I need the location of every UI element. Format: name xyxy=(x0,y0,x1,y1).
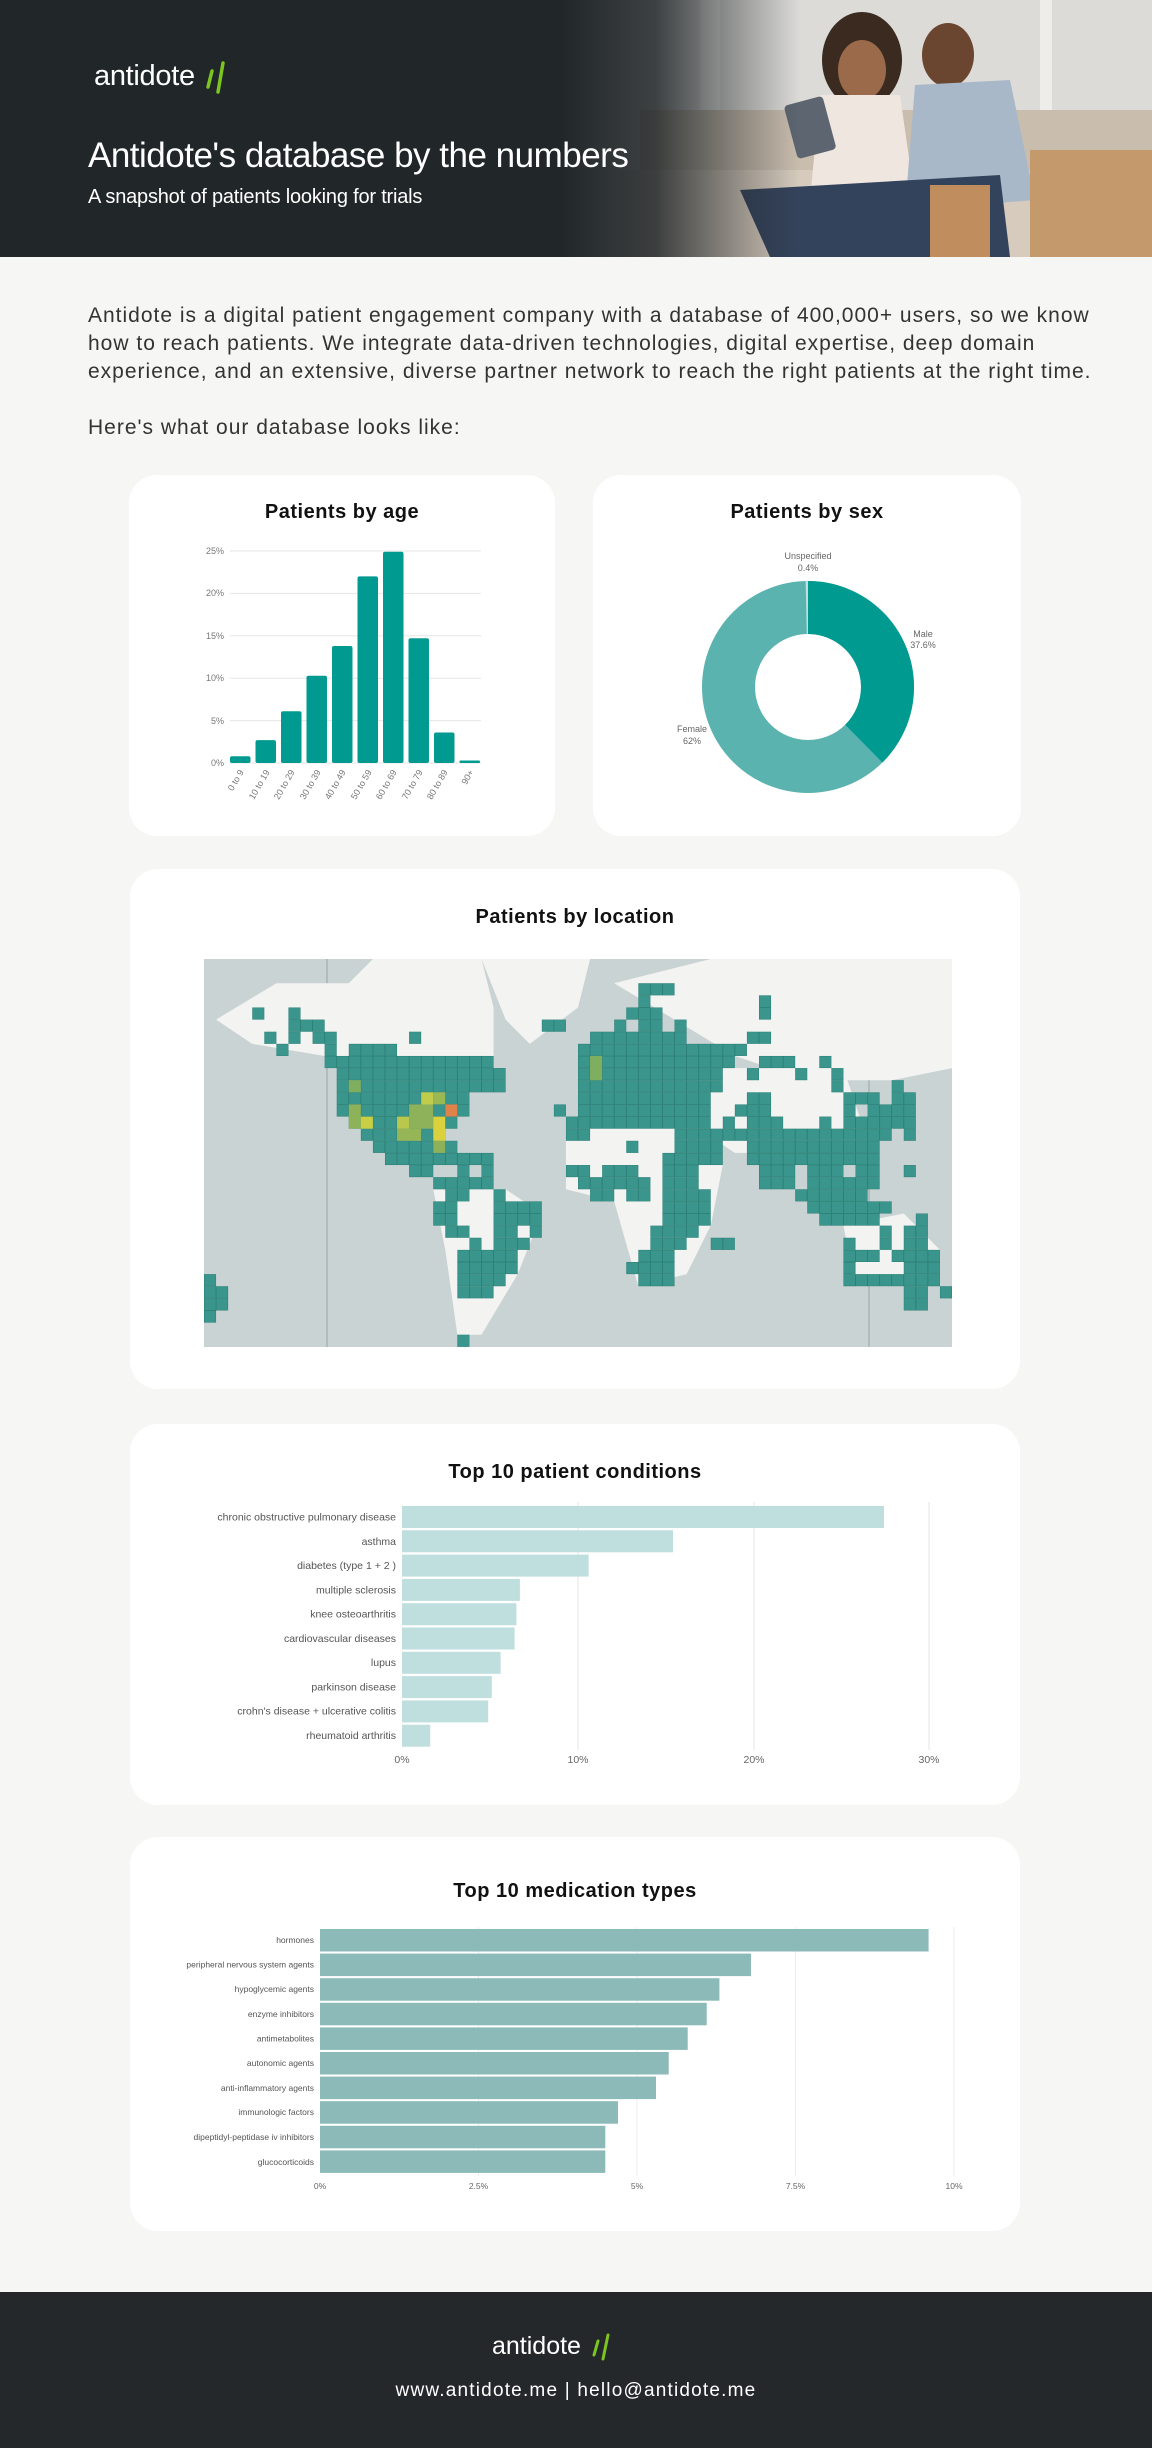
intro text: Here's what our database looks like: xyxy=(88,416,461,439)
chart: medication bars: 0% xyxy=(314,2181,327,2191)
chart: conditions bars: rheumatoid arthritis xyxy=(306,1730,396,1742)
chart: conditions bars: multiple sclerosis xyxy=(316,1584,396,1596)
chart: age bars: 10 to 19 xyxy=(247,768,272,801)
chart: conditions bars xyxy=(217,1502,940,1766)
chart: conditions bars: 0% xyxy=(394,1754,410,1766)
title: Antidote's database by the numbers xyxy=(88,136,628,175)
chart: age bars: 0 to 9 xyxy=(226,768,246,793)
chart: medication bars: 5% xyxy=(631,2181,644,2191)
map: grid world map xyxy=(204,959,952,1347)
panel: patients by location xyxy=(130,869,1020,1389)
intro text xyxy=(88,304,1092,439)
footer logo: antidote xyxy=(492,2332,581,2360)
chart: medication bars: immunologic factors xyxy=(238,2107,314,2117)
chart: age bars: 20% xyxy=(206,588,224,598)
chart: medication bars: autonomic agents xyxy=(247,2058,314,2068)
heading: Patients by age xyxy=(265,501,419,523)
chart: age bars: 60 to 69 xyxy=(374,768,399,801)
chart: conditions bars: parkinson disease xyxy=(311,1682,396,1694)
chart: medication bars xyxy=(186,1927,963,2191)
heading: Top 10 patient conditions xyxy=(448,1461,702,1483)
panel: patients by age xyxy=(129,475,555,836)
heading: Top 10 medication types xyxy=(453,1880,697,1902)
chart: sex donut xyxy=(677,551,936,793)
icon: logo slashes xyxy=(206,61,225,94)
chart: age bars: 80 to 89 xyxy=(425,768,450,801)
chart: medication bars: hormones xyxy=(276,1935,314,1945)
chart: sex donut: Male xyxy=(913,629,933,639)
heading: Patients by location xyxy=(476,906,674,928)
chart: sex donut: 62% xyxy=(683,736,701,746)
chart: medication bars: enzyme inhibitors xyxy=(248,2009,314,2019)
chart: medication bars: antimetabolites xyxy=(257,2034,314,2044)
chart: age bars: 10% xyxy=(206,673,224,683)
footer contact text: www.antidote.me | hello@antidote.me xyxy=(396,2380,756,2401)
chart: medication bars: anti-inflammatory agents xyxy=(221,2083,314,2093)
panel: top 10 medication types xyxy=(130,1837,1020,2231)
chart: conditions bars: cardiovascular diseases xyxy=(284,1633,396,1645)
chart: conditions bars: lupus xyxy=(371,1657,396,1669)
chart: medication bars: 7.5% xyxy=(786,2181,806,2191)
chart: age bars: 15% xyxy=(206,631,224,641)
subtitle: A snapshot of patients looking for trials xyxy=(88,186,422,208)
footer xyxy=(0,2292,1152,2448)
chart: medication bars: 10% xyxy=(945,2181,963,2191)
header photo xyxy=(588,0,1152,257)
intro text: Antidote is a digital patient engagement company with a database of 400,000+ users, so we know xyxy=(88,304,1090,327)
chart: sex donut: 37.6% xyxy=(910,640,936,650)
chart: sex donut: Unspecified xyxy=(784,551,832,561)
chart: conditions bars: diabetes (type 1 + 2 ) xyxy=(297,1560,396,1572)
chart: conditions bars: 30% xyxy=(918,1754,940,1766)
chart: age bars: 50 to 59 xyxy=(349,768,374,801)
chart: conditions bars: asthma xyxy=(362,1536,396,1548)
chart: age bars: 70 to 79 xyxy=(400,768,425,801)
chart: age bars: 0% xyxy=(211,758,224,768)
chart: conditions bars: knee osteoarthritis xyxy=(310,1608,396,1620)
chart: medication bars: peripheral nervous system agents xyxy=(186,1960,314,1970)
chart: age bars xyxy=(206,546,481,801)
chart: conditions bars: 10% xyxy=(567,1754,589,1766)
logo: antidote xyxy=(94,60,195,92)
chart: conditions bars: crohn's disease + ulcerative colitis xyxy=(237,1706,396,1718)
chart: sex donut: Female xyxy=(677,724,707,734)
chart: sex donut: 0.4% xyxy=(798,563,818,573)
intro text: experience, and an extensive, diverse partner network to reach the right patients at the right time. xyxy=(88,360,1092,383)
chart: conditions bars: chronic obstructive pulmonary disease xyxy=(217,1512,396,1524)
heading: Patients by sex xyxy=(730,501,884,523)
panel: patients by sex xyxy=(593,475,1021,836)
chart: age bars: 30 to 39 xyxy=(298,768,323,801)
icon: logo slashes xyxy=(592,2334,610,2360)
chart: medication bars: dipeptidyl-peptidase iv inhibitors xyxy=(194,2132,314,2142)
chart: age bars: 25% xyxy=(206,546,224,556)
chart: medication bars: hypoglycemic agents xyxy=(235,1984,314,1994)
header xyxy=(0,0,1152,257)
chart: age bars: 90+ xyxy=(459,768,476,786)
panel: top 10 patient conditions xyxy=(130,1424,1020,1805)
chart: medication bars: glucocorticoids xyxy=(258,2157,314,2167)
chart: age bars: 20 to 29 xyxy=(272,768,297,801)
chart: medication bars: 2.5% xyxy=(469,2181,489,2191)
chart: age bars: 5% xyxy=(211,716,224,726)
intro text: how to reach patients. We integrate data-driven technologies, digital expertise, deep domain xyxy=(88,332,1035,355)
chart: conditions bars: 20% xyxy=(743,1754,765,1766)
chart: age bars: 40 to 49 xyxy=(323,768,348,801)
